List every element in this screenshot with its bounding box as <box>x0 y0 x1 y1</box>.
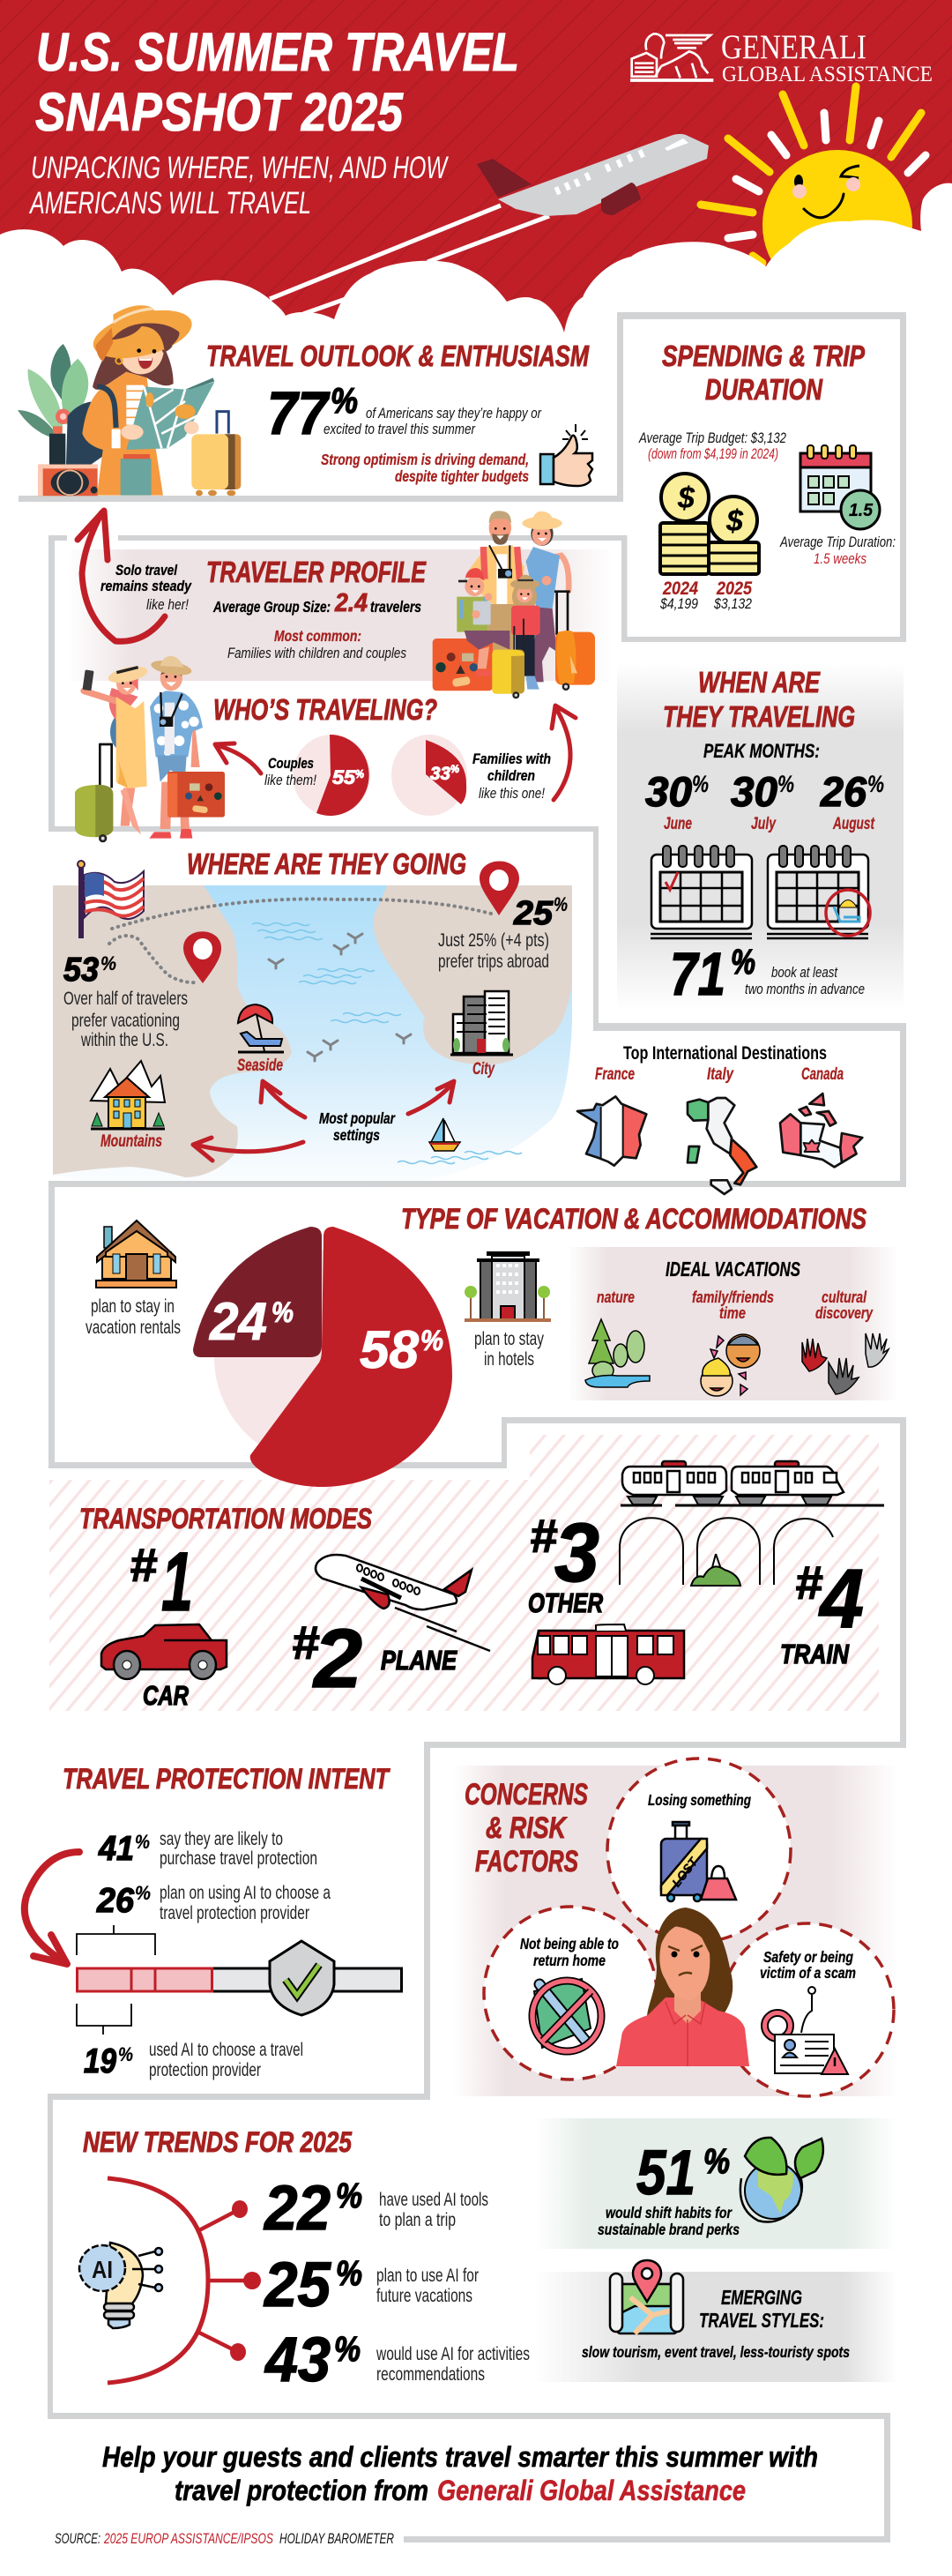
text: solo travel: remains steady <box>100 578 192 594</box>
stat: 53%: 53 <box>63 952 99 989</box>
heading: & RISK <box>486 1811 568 1845</box>
icon: bus <box>532 1624 684 1684</box>
heading: NEW TRENDS FOR 2025 <box>83 2126 353 2158</box>
panel: spending and trip duration <box>638 340 896 612</box>
heading: DURATION <box>705 373 823 406</box>
icon: friends faces <box>701 1334 760 1396</box>
panel: new trends for 2025 <box>79 2126 850 2395</box>
subtitle: UNPACKING WHERE, WHEN, AND HOW <box>31 151 449 185</box>
icon: log cabin <box>96 1221 176 1288</box>
call to action: Help your guests and clients travel smarter this summer with <box>102 2441 818 2473</box>
callout: emerging travel styles: TRAVEL STYLES: <box>699 2309 824 2332</box>
icon: calendar with check <box>651 846 752 938</box>
text: solo travel: like her! <box>146 596 189 613</box>
call to action: travel protection from <box>175 2475 428 2506</box>
arrow: to bar <box>25 1852 79 1964</box>
icon: handprints <box>802 1333 889 1394</box>
pie chart: couples 55% <box>293 735 370 816</box>
text: solo travel <box>100 562 192 613</box>
title: SNAPSHOT 2025 <box>35 82 404 142</box>
icon: coin stacks <box>660 474 759 574</box>
label: seaside: Seaside <box>237 1057 283 1075</box>
pie chart: accommodations: % <box>420 1325 443 1356</box>
stat: June 30% <box>645 768 709 833</box>
pie chart: couples 55%: 55 <box>332 766 356 788</box>
circle: safety or scam: Safety or being <box>763 1948 853 1966</box>
label: family/friends time: time <box>719 1304 746 1322</box>
logo: Generali Global Assistance <box>630 28 933 86</box>
heading: Top International Destinations <box>623 1043 827 1064</box>
stat: 22%: % <box>336 2177 362 2215</box>
stat: 25%: plan to use AI for <box>376 2266 479 2286</box>
striped transport background <box>49 1435 879 1711</box>
heading: FACTORS <box>475 1845 578 1878</box>
rank #4 train: 4 <box>818 1552 864 1646</box>
stat: 25% <box>263 2251 479 2320</box>
average trip budget <box>638 429 786 462</box>
text: most popular settings: settings <box>333 1126 380 1144</box>
labels: yearly budgets: $3,132 <box>713 595 752 612</box>
panel: travel protection intent <box>25 1763 402 2080</box>
icon: scam warning <box>762 1987 848 2074</box>
rank #3 other <box>528 1506 684 1684</box>
contrails <box>270 205 549 314</box>
label: mountains: Mountains <box>100 1132 162 1151</box>
title: U.S. SUMMER TRAVEL <box>36 22 519 82</box>
description <box>324 405 542 437</box>
stat: 22%: to plan a trip <box>379 2210 456 2230</box>
most common: Families with children and couples <box>227 645 406 661</box>
source line: HOLIDAY BAROMETER <box>279 2530 394 2547</box>
circle: safety or scam <box>721 1923 894 2096</box>
icon: trees and lake <box>585 1319 650 1387</box>
icon: calendar 1.5: 1.5 <box>849 501 874 520</box>
circle: not being able to return home: return home <box>533 1952 606 1969</box>
stat: 26%: 26 <box>96 1882 134 1920</box>
circle: safety or scam: victim of a scam <box>760 1964 856 1982</box>
arrow: couples <box>215 743 261 773</box>
panel: type of vacation and accommodations <box>86 1203 889 1487</box>
country labels <box>595 1065 844 1084</box>
dotted route to destinations <box>109 899 495 982</box>
labels: yearly budgets: 2025 <box>716 579 752 599</box>
illustration: couple taking selfie <box>75 656 225 842</box>
text: families with children: children <box>487 767 535 784</box>
stat: 41%: say they are likely to <box>160 1829 283 1849</box>
stat: August 26% <box>820 768 884 833</box>
stat: 43%: would use AI for activities <box>376 2344 530 2364</box>
callout: sustainable habits: % <box>703 2142 730 2181</box>
airplane <box>477 134 709 216</box>
rank #3 other: OTHER <box>528 1587 603 1618</box>
label: nature: nature <box>597 1288 635 1306</box>
arrow: families <box>552 706 576 800</box>
source line: 2025 EUROP ASSISTANCE/IPSOS <box>103 2531 273 2547</box>
icon: shield with check <box>270 1941 334 2015</box>
stat: 77%: 77 <box>267 379 331 447</box>
icon: AI light bulb: AI <box>92 2256 113 2283</box>
rank #1 car: 1 <box>161 1535 193 1629</box>
rank #4 train: TRAIN <box>780 1639 849 1669</box>
callout: sustainable habits <box>598 2138 823 2238</box>
callout: emerging travel styles <box>582 2260 850 2361</box>
stat: 53%: % <box>100 952 116 974</box>
rank #1 car: CAR <box>143 1680 189 1711</box>
icon: lost luggage: LOST <box>669 1854 701 1890</box>
title <box>35 22 519 142</box>
callout: despite tighter budgets <box>395 467 529 485</box>
heading: TRAVEL PROTECTION INTENT <box>63 1763 390 1795</box>
text: within the U.S.: prefer vacationing <box>71 1011 180 1031</box>
clouds <box>0 183 952 353</box>
text: abroad <box>438 930 549 972</box>
panel backgrounds <box>67 549 904 2382</box>
pie chart: couples 55%: % <box>355 767 364 780</box>
stat: August 26%: August <box>832 815 874 833</box>
text: families with children <box>472 750 551 802</box>
callout <box>321 451 529 485</box>
heading: WHEN ARE <box>698 666 821 698</box>
panel: top international destinations <box>573 1043 862 1194</box>
text: vacation rentals <box>86 1296 181 1338</box>
stat: 43%: 43 <box>264 2326 331 2395</box>
label: city: City <box>472 1060 495 1079</box>
call to action <box>102 2441 818 2506</box>
icon: earth with leaves <box>740 2138 823 2222</box>
stat: August 26%: 26 <box>820 768 867 815</box>
heading: THEY TRAVELING <box>663 700 855 733</box>
icon: plane <box>316 1555 490 1651</box>
heading: TRANSPORTATION MODES <box>79 1503 373 1534</box>
panel: traveler profile <box>75 511 595 842</box>
stat: 77%: % <box>331 380 358 421</box>
callout: emerging travel styles: slow tourism, event travel, less-touristy spots <box>582 2343 850 2361</box>
stat: 22% <box>263 2174 488 2244</box>
icon: calendar with beach chair <box>767 846 870 938</box>
stat: 43%: % <box>334 2330 361 2369</box>
text: couples: Couples <box>268 755 314 772</box>
stat: 26%: plan on using AI to choose a <box>160 1883 331 1903</box>
country labels: Italy <box>707 1065 734 1084</box>
stat: 19%: used AI to choose a travel <box>149 2040 303 2060</box>
text: couples: like them! <box>264 772 316 788</box>
stat: 26% <box>96 1882 331 1923</box>
heading <box>662 340 866 406</box>
description <box>745 964 865 997</box>
stat: 43%: recommendations <box>376 2364 485 2385</box>
birds and waves <box>252 922 522 1164</box>
stat: 25%: 25 <box>513 895 554 932</box>
stat: 26%: % <box>135 1882 151 1904</box>
panel: where are they going <box>63 847 568 1164</box>
stat: 25%: % <box>336 2254 362 2293</box>
stat: 22%: have used AI tools <box>379 2190 488 2210</box>
text: families with children: like this one! <box>479 785 545 802</box>
text: solo travel: Solo travel <box>115 562 178 579</box>
description: two months in advance <box>745 981 865 997</box>
circle: losing something: Losing something <box>648 1791 751 1809</box>
stat: June 30%: % <box>692 771 709 797</box>
icon: sailboat <box>429 1118 460 1151</box>
text: couples <box>264 755 316 788</box>
pie chart: accommodations: 58 <box>360 1320 420 1379</box>
rank #4 train: # <box>795 1557 823 1609</box>
circle: not being able to return home <box>484 1907 657 2079</box>
callout: sustainable habits: 51 <box>636 2139 695 2208</box>
icon: American flag <box>78 861 144 938</box>
average group size: 2.4 <box>334 589 368 617</box>
stat: 19%: protection provider <box>149 2060 261 2080</box>
panel: transportation modes <box>79 1461 884 1711</box>
icon: pin abroad <box>480 861 519 915</box>
pie chart: families 33%: 33 <box>430 764 450 784</box>
stat: 26%: travel protection provider <box>160 1903 309 1923</box>
rank #2 plane: PLANE <box>381 1645 457 1676</box>
stat: 22%: 22 <box>263 2174 331 2244</box>
rank #2 plane: 2 <box>312 1612 362 1706</box>
bar chart with brackets <box>77 1925 402 2035</box>
stat: 41%: 41 <box>98 1830 134 1868</box>
rank #4 train <box>620 1461 884 1669</box>
trip duration text: 1.5 weeks <box>814 551 866 567</box>
callout: Strong optimism is driving demand, <box>321 451 529 468</box>
stat: August 26%: % <box>867 771 884 797</box>
callout: emerging travel styles: EMERGING <box>721 2286 802 2309</box>
rank #2 plane: # <box>292 1617 320 1669</box>
stat: June 30%: 30 <box>645 768 692 815</box>
icon: thumbs up <box>540 424 592 486</box>
stat: 25% <box>513 893 568 932</box>
sun with rays <box>701 86 926 300</box>
heading: WHERE ARE THEY GOING <box>187 847 466 880</box>
circle: not being able to return home: Not being able to <box>520 1935 619 1953</box>
label: cultural discovery: cultural <box>822 1288 867 1306</box>
stat: 19% <box>84 2040 303 2080</box>
stat: 71%: % <box>731 943 755 982</box>
label: cultural discovery <box>815 1288 874 1322</box>
icon: no plane <box>532 1979 601 2051</box>
rank #1 car <box>101 1535 227 1711</box>
stat: 71%: 71 <box>670 940 725 1008</box>
illustration: woman traveler with map <box>18 302 241 496</box>
country labels: Canada <box>801 1065 844 1084</box>
stat: 25%: future vacations <box>376 2286 472 2306</box>
most common: Most common: <box>274 627 361 645</box>
label: cultural discovery: discovery <box>815 1304 874 1322</box>
description: book at least <box>771 964 838 981</box>
stat: 41% <box>98 1829 317 1869</box>
country labels: France <box>595 1065 635 1084</box>
labels: yearly budgets: 2024 <box>662 579 698 599</box>
icon: calendar 1.5 <box>800 445 880 529</box>
rank #3 other: 3 <box>554 1506 599 1600</box>
average trip budget: (down from $4,199 in 2024) <box>648 446 778 462</box>
panel: travel outlook <box>18 302 592 496</box>
description: excited to travel this summer <box>324 421 476 437</box>
pie chart: accommodations: % <box>271 1296 294 1328</box>
stat: 25%: % <box>554 893 568 915</box>
icon: hotel <box>465 1251 551 1322</box>
icon: map with pin <box>610 2260 683 2333</box>
panel: concerns and risk factors <box>465 1758 894 2096</box>
arrows: to settings <box>193 1081 454 1161</box>
callout: sustainable habits: sustainable brand perks <box>598 2221 740 2238</box>
stat: 19%: 19 <box>84 2042 116 2080</box>
most common <box>227 627 406 661</box>
text: families with children: Families with <box>472 750 551 767</box>
average group size <box>212 589 421 617</box>
text: hotels <box>474 1329 544 1370</box>
heading: IDEAL VACATIONS <box>666 1258 800 1281</box>
maps: France, Italy, Canada <box>573 1094 862 1194</box>
text: hotels: plan to stay <box>474 1329 544 1349</box>
text: within the U.S.: Over half of travelers <box>63 989 188 1009</box>
map area background: where are they going <box>53 885 572 1192</box>
panel: ideal vacations <box>585 1258 889 1396</box>
icon: lost luggage <box>661 1822 736 1901</box>
text: within the U.S.: within the U.S. <box>80 1030 168 1050</box>
subheading: PEAK MONTHS: <box>703 740 820 762</box>
stat: 41%: purchase travel protection <box>160 1848 317 1869</box>
text: vacation rentals: plan to stay in <box>91 1296 175 1317</box>
average group size: Average Group Size: <box>212 598 331 616</box>
icon: car <box>101 1624 227 1679</box>
average group size: travelers <box>370 598 421 616</box>
logo: Generali Global Assistance: GENERALI <box>721 28 866 66</box>
icon: coin stacks: $ <box>725 504 744 538</box>
heading: TRAVELER PROFILE <box>206 556 427 588</box>
stat: 19%: % <box>118 2043 133 2065</box>
source line <box>55 2530 394 2547</box>
stat: June 30%: June <box>664 815 692 833</box>
icon: train on viaduct <box>620 1461 884 1586</box>
heading: WHO’S TRAVELING? <box>213 693 437 726</box>
rank #1 car: # <box>130 1540 158 1592</box>
labels: yearly budgets: $4,199 <box>659 595 698 612</box>
description: of Americans say they’re happy or <box>366 405 542 422</box>
subtitle: AMERICANS WILL TRAVEL <box>29 186 311 220</box>
logo: Generali Global Assistance: GLOBAL ASSISTANCE <box>722 63 933 86</box>
call to action: Generali Global Assistance <box>437 2475 746 2506</box>
stat: July 30% <box>731 768 794 833</box>
heading: CONCERNS <box>465 1778 588 1811</box>
trip duration text <box>779 534 896 567</box>
rank #2 plane <box>292 1555 490 1706</box>
stat: July 30%: 30 <box>731 768 777 815</box>
text: abroad: prefer trips abroad <box>438 952 549 972</box>
heading <box>663 666 855 733</box>
icon: coin stacks: $ <box>677 482 695 515</box>
stat: 25%: 25 <box>263 2251 331 2320</box>
icon: AI light bulb <box>79 2243 162 2328</box>
rank #3 other: # <box>530 1511 558 1563</box>
panel: when are they traveling <box>645 666 884 1008</box>
stat: 41%: % <box>135 1831 150 1853</box>
stat: July 30%: July <box>751 815 777 833</box>
header background <box>0 0 952 353</box>
source line: SOURCE: <box>55 2530 100 2547</box>
circle: losing something <box>607 1758 791 1942</box>
callout: sustainable habits: would shift habits for <box>606 2204 733 2221</box>
average trip budget: Average Trip Budget: $3,132 <box>638 429 786 446</box>
text: abroad: Just 25% (+4 pts) <box>438 930 549 951</box>
subtitle <box>29 151 449 220</box>
trip duration text: Average Trip Duration: <box>779 534 896 550</box>
stat: July 30%: % <box>777 771 794 797</box>
icon: city buildings <box>450 991 513 1055</box>
label: family/friends time <box>692 1288 774 1322</box>
pie chart: accommodations: 24 <box>209 1292 267 1351</box>
pie chart: families 33%: % <box>450 763 459 775</box>
heading: TRAVEL OUTLOOK & ENTHUSIASM <box>206 340 590 372</box>
stat: 43% <box>264 2326 530 2395</box>
text: hotels: in hotels <box>484 1349 534 1370</box>
icon: mountain lodge <box>91 1061 165 1129</box>
text: most popular settings: Most popular <box>319 1109 396 1127</box>
arrow: solo travel <box>78 511 165 641</box>
pie chart: accommodations <box>193 1227 452 1487</box>
icon: seaside chair and umbrella <box>238 1004 284 1052</box>
diagram: AI branches <box>108 2178 261 2383</box>
pie chart: families 33% <box>391 735 467 816</box>
label: family/friends time: family/friends <box>692 1288 774 1306</box>
heading: SPENDING & TRIP <box>662 340 866 372</box>
labels: yearly budgets <box>659 579 752 612</box>
text: vacation rentals: vacation rentals <box>86 1318 181 1338</box>
icon: pin U.S. <box>183 931 221 983</box>
text: within the U.S. <box>63 989 188 1050</box>
text: most popular settings <box>319 1109 396 1144</box>
heading <box>465 1778 588 1878</box>
illustration: worried woman <box>616 1908 749 2066</box>
illustration: family with luggage <box>433 511 595 698</box>
